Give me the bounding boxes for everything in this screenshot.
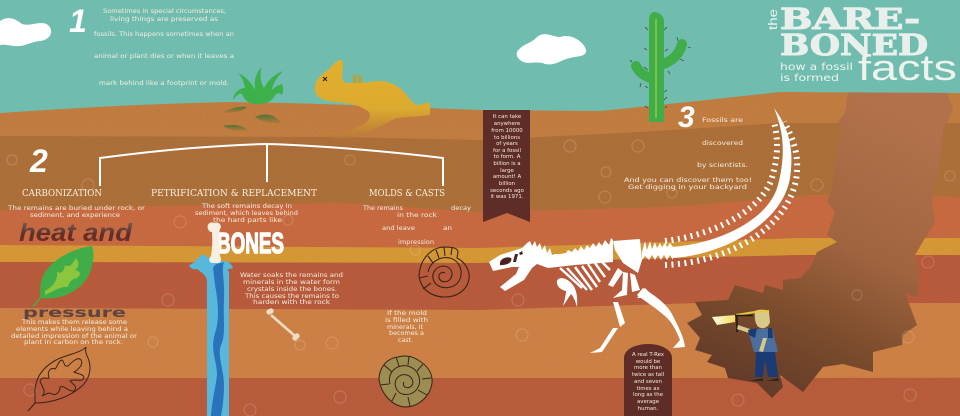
fossil watermarks: [7, 140, 955, 416]
text block: molds intro: [362, 205, 471, 246]
shoes: [749, 378, 779, 381]
text block: carbonization result: detailed impression of the animal or: [11, 333, 138, 340]
text block: molds intro: impression: [398, 239, 434, 246]
text block: petrification intro: the hard parts like: [213, 217, 282, 224]
text block: petrification intro: sediment, which leaves behind: [195, 210, 298, 217]
legs: [608, 268, 623, 287]
text block: cast explanation: becomes a: [389, 330, 424, 337]
text block: step 3: by scientists.: [697, 162, 748, 169]
callout tombstone: T-Rex size: [624, 344, 672, 416]
text block: molds intro: decay: [451, 205, 471, 212]
heading: molds and casts: MOLDS & CASTS: [369, 188, 445, 199]
cloud left: [0, 18, 51, 46]
text block: step 1: [94, 8, 234, 87]
text block: cast explanation: cast.: [398, 337, 413, 344]
text block: molds intro: The remains: [362, 205, 403, 212]
icon: ammonite mold outline: [419, 247, 469, 297]
text block: step 3: discovered: [702, 140, 743, 147]
callout banner: time to fossilize: amount! A: [493, 174, 521, 180]
title: facts: [858, 47, 957, 88]
title: BONED: [780, 28, 928, 62]
headlamp strap: [736, 311, 769, 315]
text block: petrification result: [240, 272, 343, 306]
text block: cast explanation: If the mold: [387, 310, 427, 317]
text block: step 3: [624, 117, 752, 191]
text block: petrification result: Water soaks the remains and: [240, 272, 343, 279]
text block: step 3: Fossils are: [702, 117, 743, 124]
hip: [613, 239, 642, 273]
icon: leaf fossil outline: [28, 347, 90, 411]
text block: petrification result: This causes the remains to: [244, 293, 339, 300]
number 3: 3: [678, 101, 695, 134]
title: the: [768, 9, 780, 30]
text block: step 3: Get digging in your backyard: [628, 184, 747, 191]
text block: carbonization intro: The remains are buried under rock, or: [7, 205, 146, 212]
callout banner: time to fossilize: billion is a: [493, 161, 521, 167]
explorer with flashlight: [712, 310, 779, 381]
callout tombstone: T-Rex size: twice as tall: [632, 372, 664, 378]
callout banner: time to fossilize: to billions: [494, 135, 520, 141]
cave shaft: [687, 92, 953, 398]
text block: petrification result: minerals in the water form: [243, 279, 340, 286]
number 2: 2: [29, 143, 48, 179]
title: BARE-: [780, 2, 920, 36]
tail vertebrae: [642, 241, 673, 260]
icon: green leaf: [33, 246, 93, 307]
callout tombstone: T-Rex size: times as: [637, 386, 660, 392]
bracket connecting the three fossil types: [100, 144, 443, 186]
text block: petrification intro: [195, 203, 298, 224]
arm: [737, 325, 750, 333]
heading: petrification and replacement: PETRIFICATION & REPLACEMENT: [151, 188, 318, 199]
title: how a fossil: [780, 62, 853, 73]
callout banner: time to fossilize: It can take: [493, 114, 522, 120]
neck and back spine: [527, 238, 613, 268]
callout banner: time to fossilize: for a fossil: [493, 148, 521, 154]
skull: [489, 243, 537, 291]
word: pressure: pressure: [23, 306, 126, 321]
callout tombstone: T-Rex size: long as the: [633, 392, 664, 398]
callout banner: time to fossilize: [483, 110, 530, 222]
text block: carbonization result: This makes them release some: [21, 319, 127, 326]
text block: cast explanation: minerals, it: [387, 324, 424, 331]
word: bones: BONES: [217, 228, 284, 260]
ground strata: [0, 90, 960, 416]
callout banner: time to fossilize: to form. A: [494, 154, 521, 160]
icon: buried leaves: [222, 107, 282, 131]
cloud centre: [517, 34, 586, 64]
title: [768, 2, 957, 88]
text block: petrification result: harden with the rock: [253, 299, 330, 306]
text block: molds intro: and leave: [382, 225, 415, 232]
callout tombstone: T-Rex size: A real T-Rex: [632, 352, 665, 358]
number 1: 1: [69, 3, 87, 39]
text block: step 1: fossils. This happens sometimes when an: [94, 31, 234, 38]
callout banner: time to fossilize: anywhere: [494, 121, 521, 127]
callout tombstone: T-Rex size: and seven: [634, 379, 662, 385]
text block: carbonization result: [11, 319, 138, 346]
arm: [557, 278, 577, 307]
text block: petrification result: crystals inside the bones.: [247, 286, 337, 293]
icon: cactus: [630, 12, 691, 122]
text block: step 1: Sometimes in special circumstances,: [103, 8, 226, 15]
title: is formed: [780, 73, 839, 84]
text block: carbonization result: plant in carbon on the rock.: [24, 339, 123, 346]
word: heat and: heat and: [19, 219, 133, 247]
shirt: [748, 328, 778, 352]
callout banner: time to fossilize: of years: [496, 141, 518, 147]
text block: petrification intro: The soft remains decay in: [201, 203, 292, 210]
ribs: [560, 262, 610, 290]
tail ticks: [665, 122, 777, 241]
text block: step 1: living things are preserved as: [110, 16, 218, 23]
text block: carbonization intro: sediment, and experience: [30, 212, 120, 219]
callout tombstone: T-Rex size: human.: [638, 406, 659, 412]
icon: water column: [189, 255, 233, 416]
light beam: [712, 315, 735, 325]
callout banner: time to fossilize: large: [500, 168, 515, 174]
callout tombstone: T-Rex size: would be: [636, 359, 661, 365]
icon: white bone rising out of water: [208, 222, 221, 263]
T-Rex skeleton: [489, 108, 797, 353]
callout banner: time to fossilize: seconds ago: [490, 188, 524, 194]
text block: cast explanation: is filled with: [385, 317, 428, 324]
callout banner: time to fossilize: it was 1971.: [490, 194, 524, 200]
text block: carbonization intro: [7, 205, 146, 219]
heading: carbonization: CARBONIZATION: [22, 188, 102, 199]
sky: [0, 0, 960, 130]
callout tombstone: T-Rex size: average: [637, 399, 660, 405]
head: [755, 310, 770, 328]
callout banner: time to fossilize: from 10000: [491, 128, 523, 134]
text block: carbonization result: elements while leaving behind a: [16, 326, 128, 333]
text block: molds intro: in the rock: [397, 212, 437, 219]
text block: step 3: And you can discover them too!: [624, 177, 752, 184]
icon: ammonite cast: [379, 356, 432, 407]
texture: [0, 90, 960, 416]
text block: step 1: mark behind like a footprint or mold.: [99, 80, 229, 87]
text block: cast explanation: [385, 310, 428, 344]
icon: small bone: [267, 309, 299, 340]
trousers: [755, 352, 778, 377]
tail: [672, 108, 791, 258]
text block: step 1: animal or plant dies or when it leaves a: [94, 53, 234, 60]
text block: molds intro: an: [443, 225, 452, 232]
callout tombstone: T-Rex size: more than: [634, 365, 662, 371]
icon: grass: [233, 67, 283, 104]
flashlight: [735, 315, 753, 332]
callout banner: time to fossilize: billion: [499, 181, 515, 187]
icon: yellow dinosaur sinking into the ground: [315, 60, 430, 138]
